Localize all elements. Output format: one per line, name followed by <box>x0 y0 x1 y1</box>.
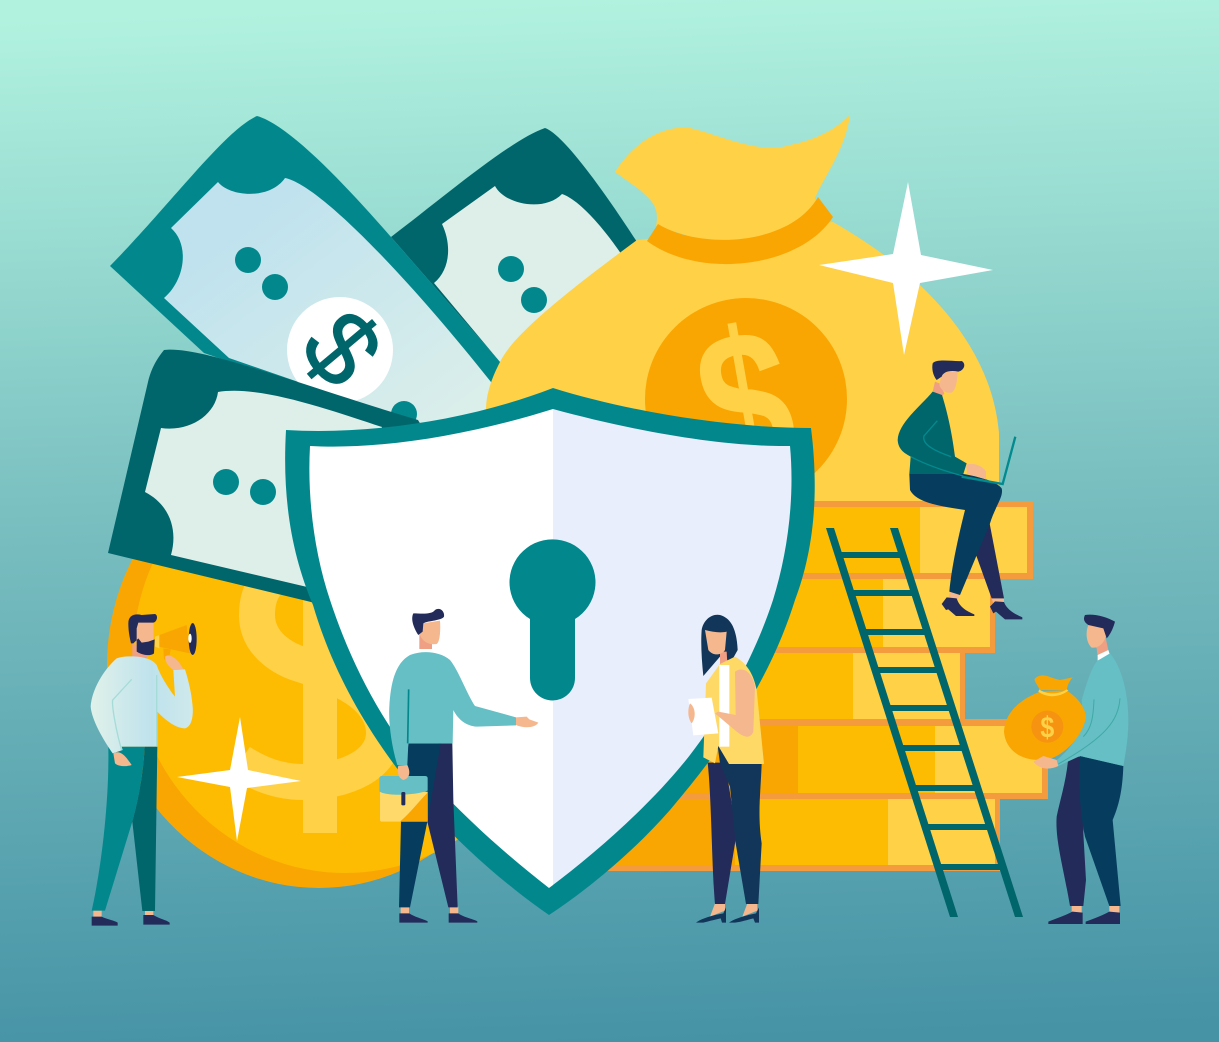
person with briefcase <box>379 609 538 923</box>
person with megaphone <box>91 614 197 926</box>
person carrying money bag <box>1004 615 1128 924</box>
money bag <box>486 115 999 530</box>
briefcase <box>379 776 428 822</box>
middle banknote with dollar seal: $ <box>279 289 405 408</box>
middle banknote with dollar seal <box>110 116 540 430</box>
front banknote <box>108 350 430 610</box>
tablet <box>688 698 718 735</box>
money bag: $ <box>681 283 810 524</box>
megaphone <box>155 623 197 661</box>
person sitting with laptop <box>898 361 1022 619</box>
small money bag: $ <box>1040 710 1054 744</box>
security shield with keyhole <box>285 388 815 915</box>
ladder <box>826 528 1023 917</box>
woman with tablet <box>688 615 764 923</box>
keyhole <box>509 539 596 700</box>
stack of gold bars <box>600 501 1048 871</box>
back banknote <box>391 128 639 362</box>
small money bag <box>1004 675 1086 760</box>
sparkle: upper right <box>819 182 993 355</box>
sparkle: on coin <box>177 717 301 841</box>
large gold coin <box>107 437 557 888</box>
